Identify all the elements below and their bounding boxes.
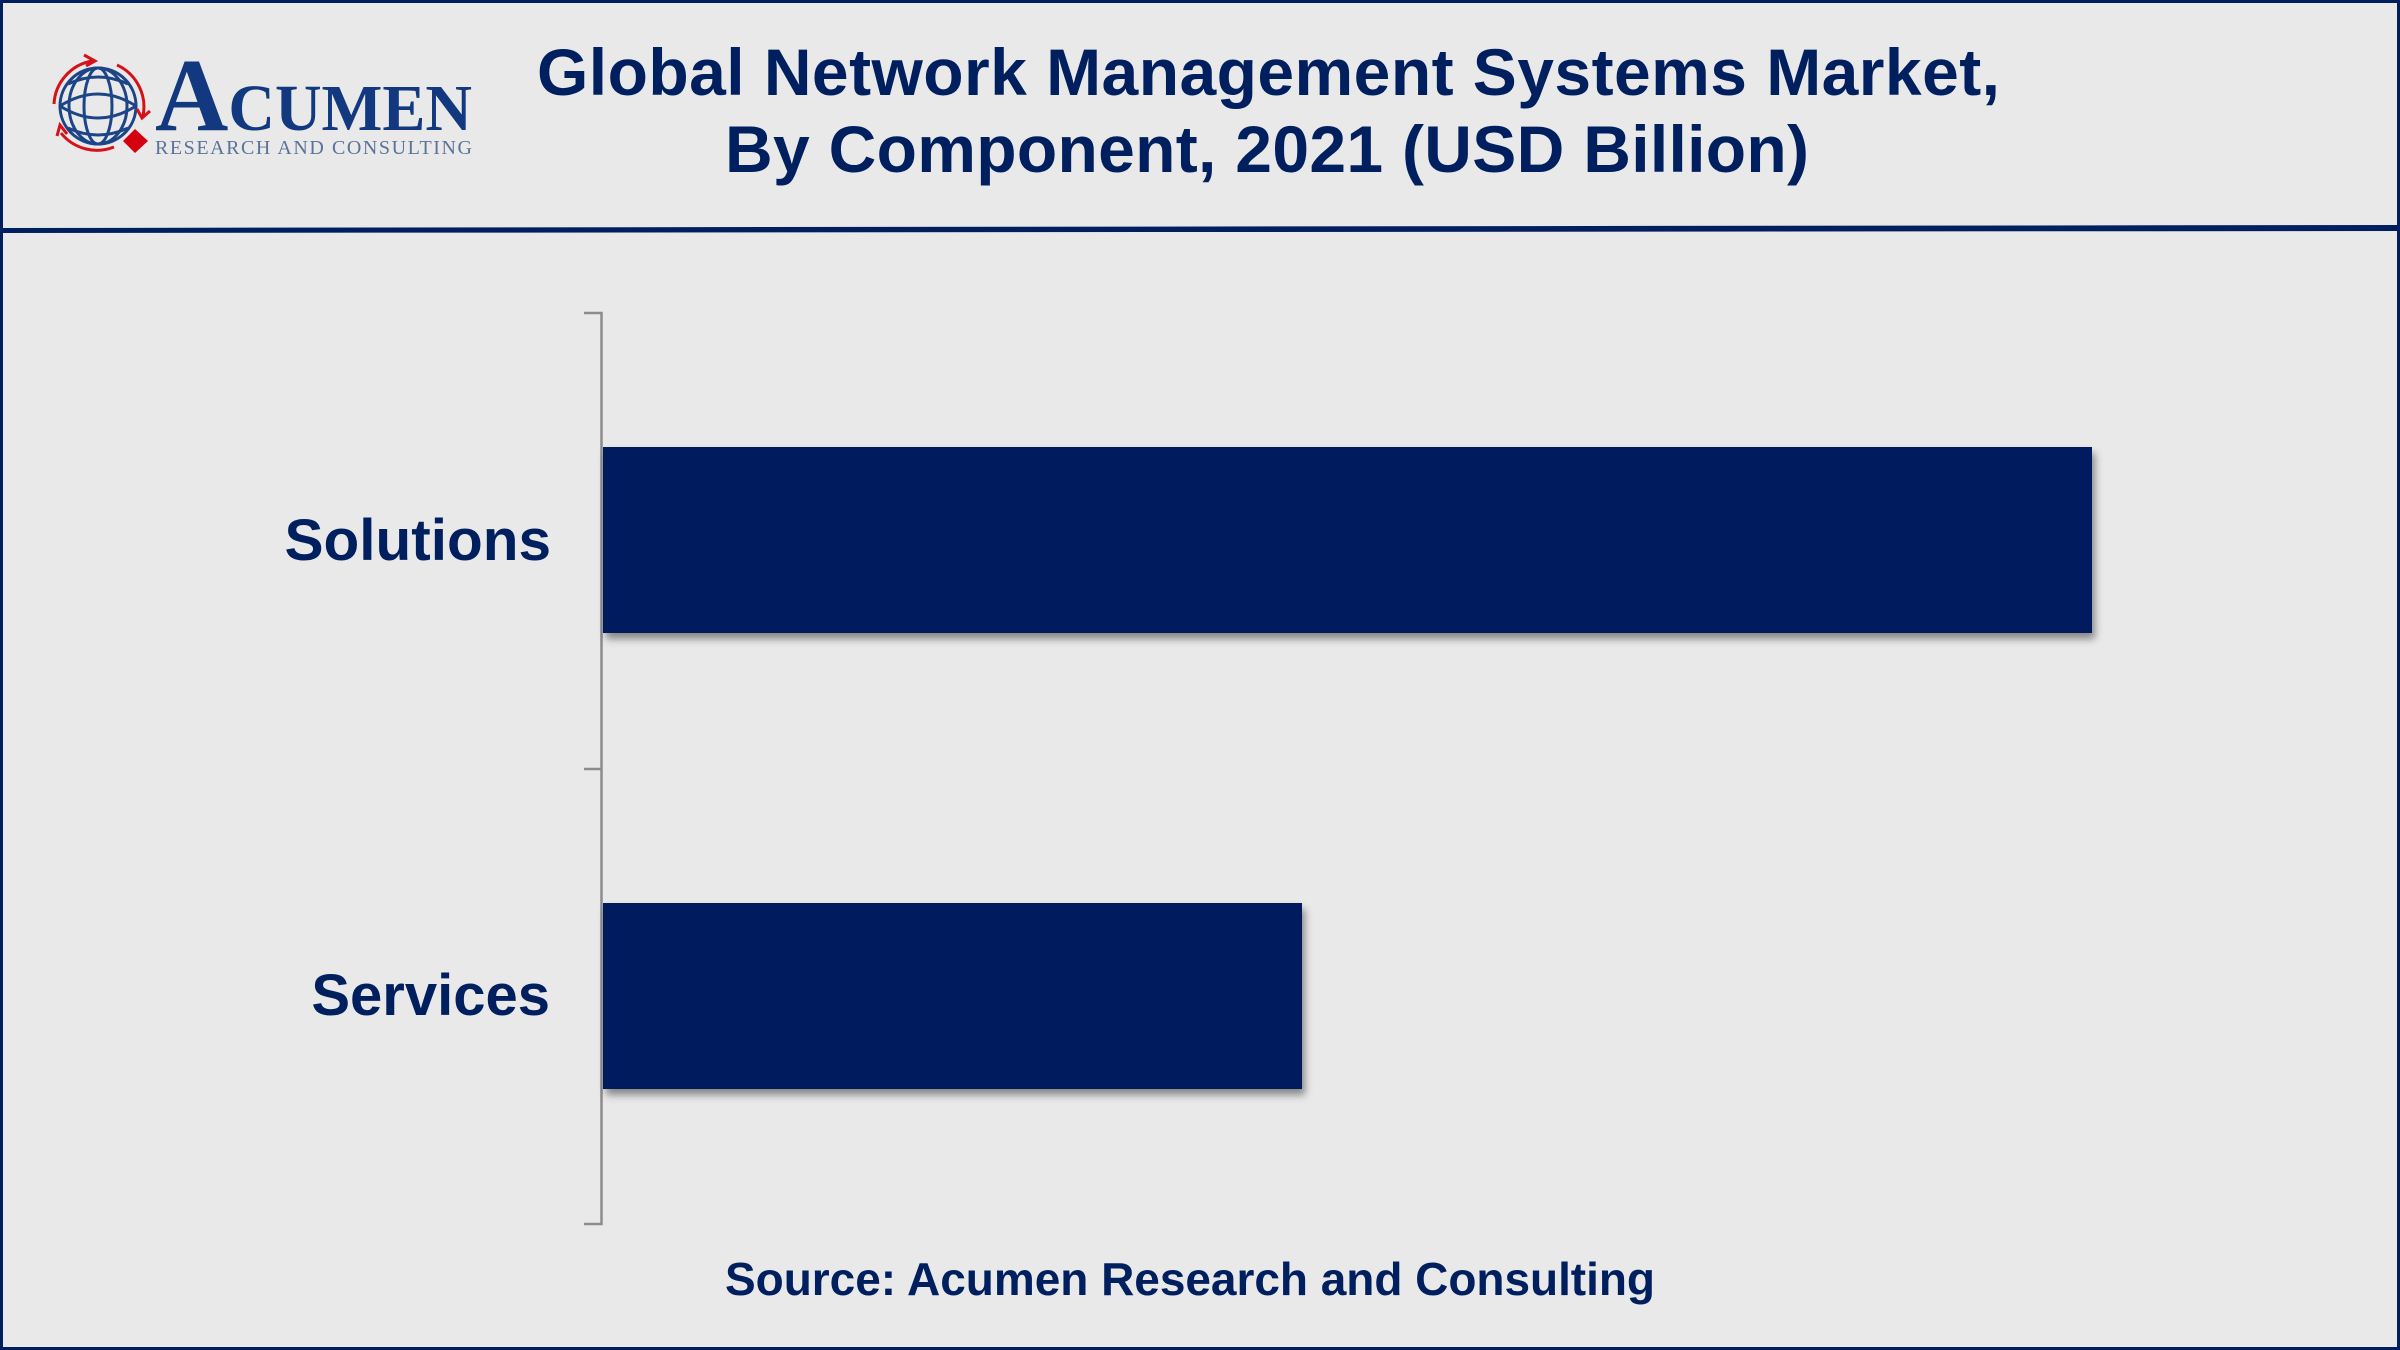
axis line with ticks bbox=[584, 313, 602, 1224]
source note: Source: Acumen Research and Consulting bbox=[725, 1253, 1655, 1305]
tagline: Research and Consulting: RESEARCH AND CONSULTING bbox=[155, 137, 472, 159]
bar: Services bbox=[603, 903, 1302, 1089]
category label: Services: Services bbox=[311, 963, 550, 1028]
title: Global Network Management Systems Market, bbox=[537, 35, 2000, 109]
title: By Component, 2021 (USD Billion) bbox=[725, 112, 1809, 186]
icon: red diamond bbox=[123, 129, 148, 153]
category label: Solutions: Solutions bbox=[285, 508, 551, 573]
icon: red circular arrows bbox=[54, 55, 150, 150]
icon: globe bbox=[60, 68, 136, 144]
title bbox=[537, 35, 2000, 186]
wordmark: Acumen: ACUMEN bbox=[155, 38, 472, 153]
header divider line bbox=[0, 225, 2400, 233]
bar: Solutions bbox=[603, 447, 2092, 633]
bar chart bbox=[285, 313, 2092, 1224]
logo: Acumen Research and Consulting bbox=[54, 38, 472, 159]
